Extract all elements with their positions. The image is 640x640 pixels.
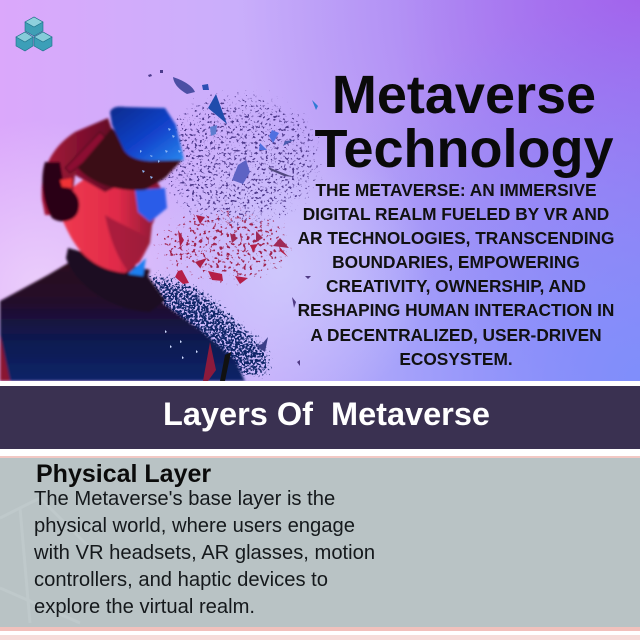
heading banner: Layers Of Metaverse	[0, 386, 640, 449]
banner heading text: Layers Of Metaverse	[163, 396, 490, 432]
icon: headset strap and body	[42, 107, 184, 221]
particles: speckled dust cloud	[140, 75, 340, 381]
description text block: AR TECHNOLOGIES, TRANSCENDING	[298, 228, 614, 248]
particles: dispersing fragments	[140, 70, 318, 381]
title: Technology	[314, 119, 614, 179]
bottom strip	[0, 635, 640, 640]
decorative faint lines	[0, 458, 120, 627]
title: Metaverse	[332, 65, 596, 125]
description text block: ECOSYSTEM.	[399, 349, 513, 369]
description text block: CREATIVITY, OWNERSHIP, AND	[326, 276, 586, 296]
description text block: DIGITAL REALM FUELED BY VR AND	[303, 204, 609, 224]
panel body text	[34, 488, 375, 618]
title	[314, 65, 614, 179]
description text block: BOUNDARIES, EMPOWERING	[332, 252, 580, 272]
description text block: RESHAPING HUMAN INTERACTION IN	[298, 300, 614, 320]
panel body text: with VR headsets, AR glasses, motion	[34, 542, 375, 564]
description text block: THE METAVERSE: AN IMMERSIVE	[316, 180, 596, 200]
description text block	[298, 180, 614, 369]
hero panel: gradient background with VR figure	[0, 0, 640, 381]
panel body text: The Metaverse's base layer is the	[34, 488, 335, 510]
icon: logo of stacked teal cubes	[16, 17, 52, 51]
description text block: A DECENTRALIZED, USER-DRIVEN	[310, 325, 602, 345]
figure: person wearing VR headset	[0, 107, 245, 381]
panel body text: physical world, where users engage	[34, 515, 355, 537]
panel heading: Physical Layer	[36, 460, 211, 488]
panel body text: controllers, and haptic devices to	[34, 569, 328, 591]
panel: physical layer	[0, 456, 640, 631]
panel body text: explore the virtual realm.	[34, 596, 255, 618]
